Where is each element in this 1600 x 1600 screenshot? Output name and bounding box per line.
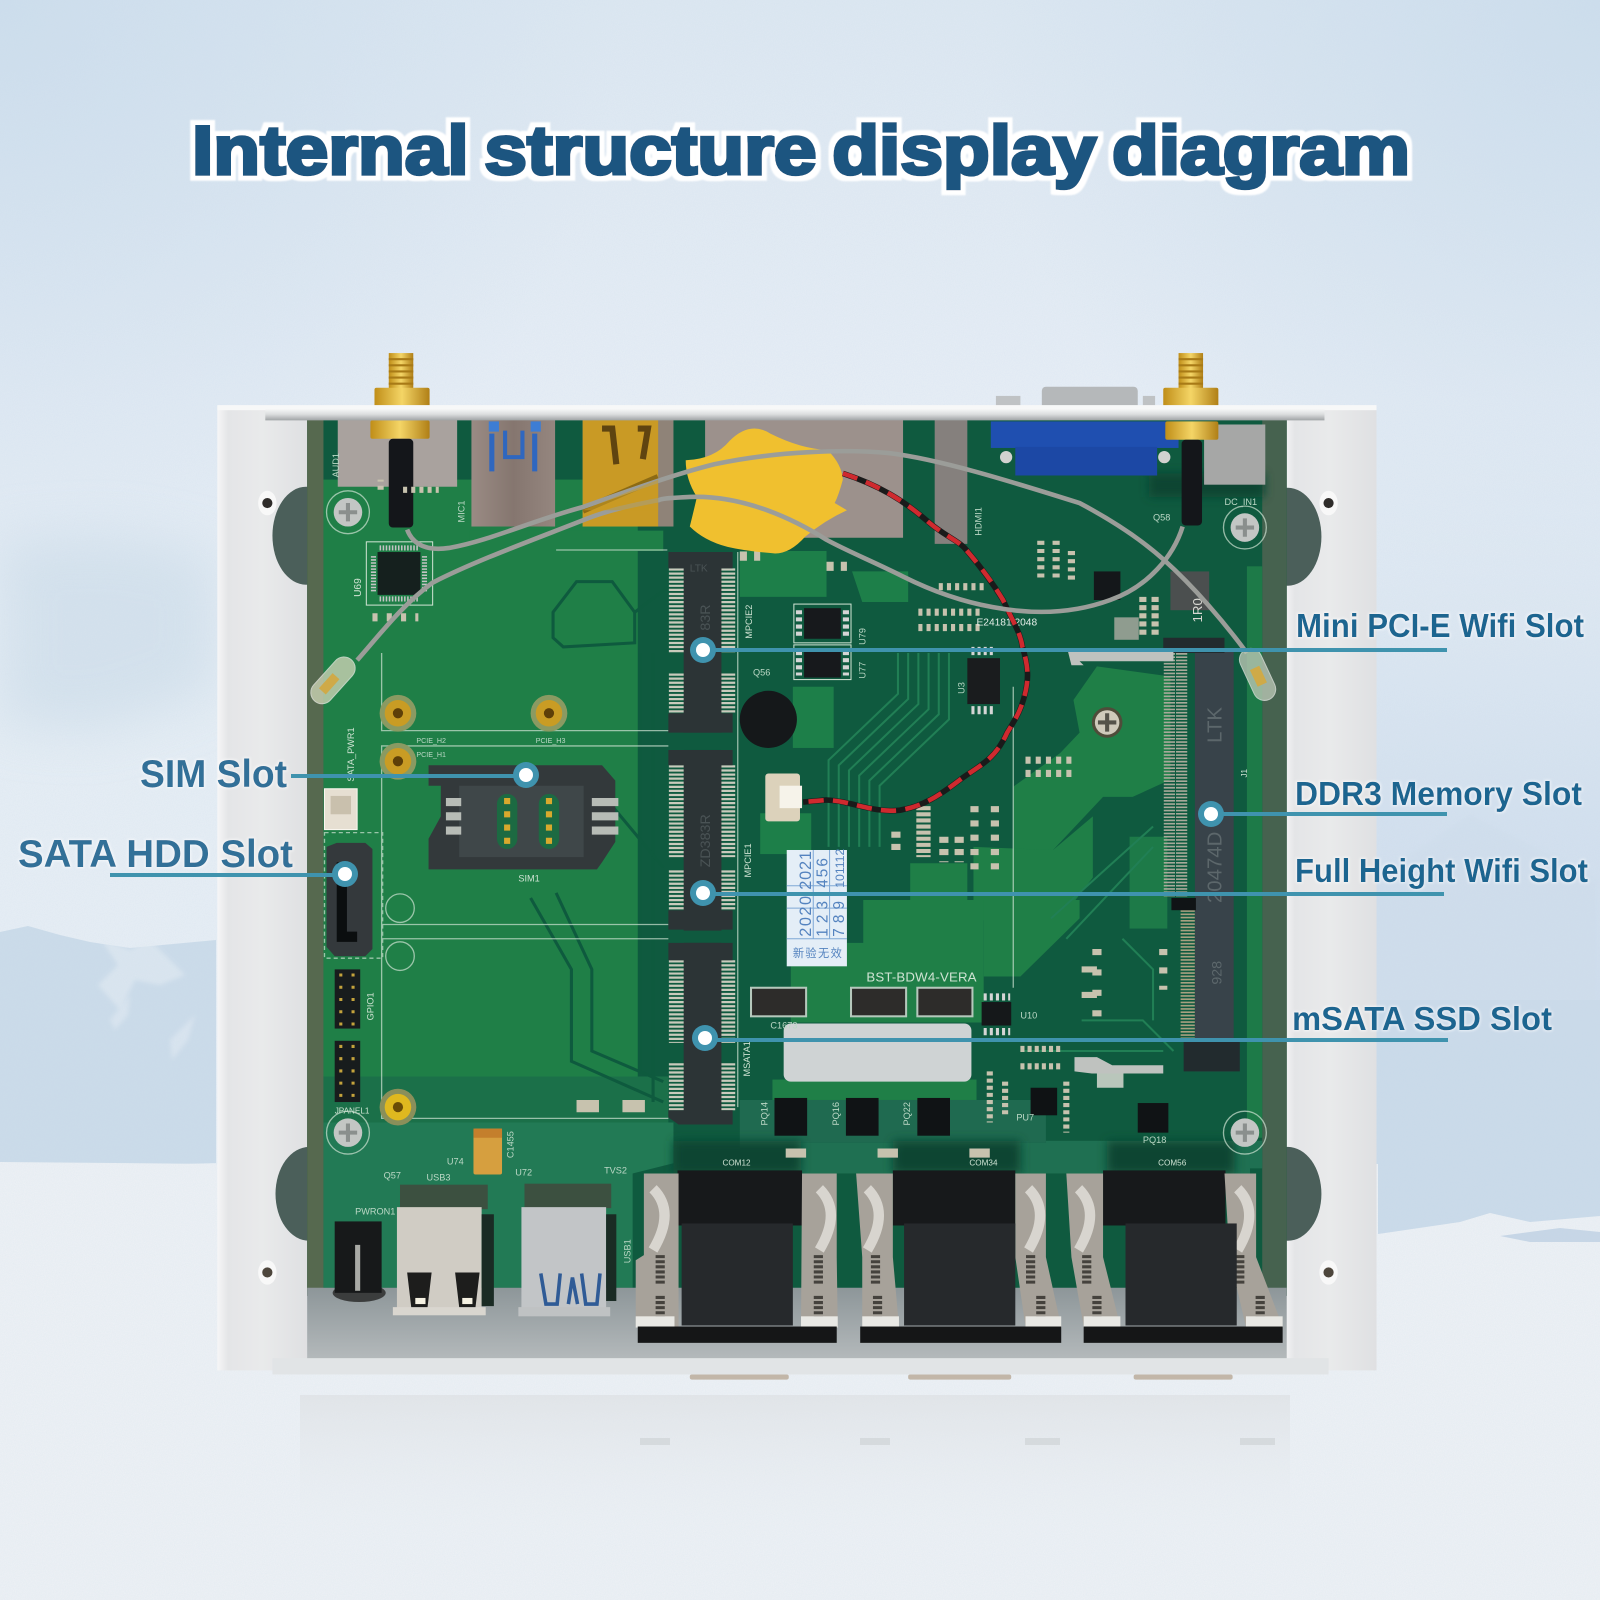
small board labels: U72	[515, 1168, 532, 1178]
right rail	[1284, 406, 1377, 1370]
small board labels: PWRON1	[355, 1206, 395, 1216]
mini PCIe slot 1: 83R	[698, 604, 714, 631]
JPANEL header: JPANEL1	[335, 1106, 370, 1115]
mini PCIe slot 2: MPCIE1	[743, 843, 753, 878]
antenna cap left	[306, 652, 360, 708]
small board labels: DC_IN1	[1224, 497, 1257, 507]
small board labels: PCIE_H1	[416, 751, 446, 759]
kapton tape overlay on cables	[583, 480, 658, 510]
antenna cap right	[1236, 645, 1279, 704]
validity sticker: 123	[815, 896, 832, 937]
callout: SATA HDD Slot: SATA HDD Slot	[18, 833, 293, 876]
small board labels: HDMI1	[974, 507, 984, 536]
shadows behind serial ports	[673, 473, 1264, 1173]
mini PCIe slot 3: mSATA: MSATA1	[742, 1041, 752, 1077]
reflection of the device on the snow	[300, 1395, 1290, 1545]
COM12 serial port	[636, 1158, 838, 1343]
callout: DDR3 Memory Slot: DDR3 Memory Slot	[1295, 775, 1582, 812]
silver blank label	[784, 1023, 971, 1082]
small board labels: USB3	[427, 1173, 450, 1183]
callout: mSATA SSD Slot	[692, 1000, 1552, 1051]
gray antenna cable B	[357, 497, 1183, 660]
audio codec chip: U69	[353, 578, 364, 597]
DDR slot metal latches	[1067, 617, 1173, 1088]
small board labels: Q57	[384, 1171, 401, 1181]
callout: DDR3 Memory Slot	[1198, 775, 1582, 827]
COM34 serial port	[856, 1158, 1061, 1343]
mini PCIe slot 1: MPCIE2	[744, 605, 754, 639]
small board labels	[331, 453, 1257, 1263]
small board labels: TVS2	[604, 1165, 627, 1175]
silkscreen outlines	[324, 491, 1266, 1154]
top port: DC jack shield	[1204, 424, 1265, 485]
SIM card slot	[429, 765, 618, 884]
USB port 2 with blue tongues	[518, 1184, 616, 1316]
callout: Full Height Wifi Slot	[690, 852, 1588, 906]
COM56 serial port	[1066, 1158, 1283, 1343]
DDR3 memory slot: 20474D	[1204, 832, 1226, 903]
battery: yellow wrapped	[686, 428, 847, 553]
validity sticker: 456	[815, 856, 832, 888]
top port: HDMI with kapton tape	[583, 419, 673, 527]
tantalum capacitor	[473, 1129, 502, 1174]
JPANEL header	[335, 1041, 370, 1115]
USB port 1	[393, 1185, 494, 1315]
top port: HDMI shield	[935, 419, 967, 544]
validity sticker: 789	[831, 896, 848, 937]
gold standoffs	[380, 695, 567, 1126]
motherboard PCB	[307, 418, 1287, 1296]
left rail	[217, 406, 307, 1370]
SATA power connector: SATA_PWR1	[346, 727, 356, 782]
SIM card slot: SIM1	[518, 874, 540, 884]
small board labels: U10	[1020, 1010, 1037, 1020]
validity sticker: 101112	[833, 849, 847, 888]
callout: Full Height Wifi Slot: Full Height Wifi Slot	[1295, 852, 1588, 889]
small ICs	[794, 571, 1209, 1133]
fan connector	[765, 773, 802, 821]
small board labels: U79	[857, 628, 867, 645]
small board labels: C1673	[770, 1021, 797, 1031]
small board labels: MIC1	[456, 501, 466, 522]
validity sticker	[787, 849, 848, 966]
antenna leads	[370, 420, 1218, 528]
DDR3 memory slot: LTK	[1204, 707, 1226, 743]
power button	[333, 1221, 386, 1302]
small board labels: PU7	[1016, 1112, 1034, 1122]
DDR3 memory slot: 928	[1209, 961, 1225, 985]
top port: VGA connector	[991, 421, 1179, 476]
top lip	[217, 405, 1377, 420]
callout: mSATA SSD Slot: mSATA SSD Slot	[1292, 1000, 1552, 1037]
validity sticker: 2021	[797, 851, 815, 890]
callout: Mini PCI-E Wifi Slot: Mini PCI-E Wifi Slot	[1296, 607, 1584, 644]
title: Internal structure display diagram	[192, 112, 1410, 189]
passive component clusters	[372, 480, 1163, 1153]
inductors row	[751, 988, 972, 1016]
callout: Mini PCI-E Wifi Slot	[690, 607, 1584, 663]
mini PCIe slot 2	[668, 750, 753, 931]
SATA power connector	[324, 727, 357, 830]
mini PCIe slot 1: LTK	[690, 563, 708, 574]
top port: LAN shield	[705, 419, 903, 538]
gray antenna cable A	[407, 451, 1247, 653]
small board labels: U74	[447, 1156, 464, 1166]
COM34 serial port: COM34	[969, 1158, 998, 1167]
validity sticker: 2020	[797, 896, 815, 937]
MOSFET row	[774, 1098, 950, 1136]
small board labels: PQ14	[759, 1102, 769, 1126]
DDR3 memory slot	[1163, 638, 1249, 1071]
callout: SIM Slot	[140, 753, 539, 796]
small board labels: E24181 2048	[977, 618, 1037, 629]
callout: SATA HDD Slot	[18, 833, 358, 887]
bottom lip	[272, 1358, 1329, 1374]
small board labels: PQ18	[1143, 1135, 1166, 1145]
small board labels: Q58	[1153, 512, 1170, 522]
small board labels: USB1	[623, 1239, 633, 1263]
small board labels: AUD1	[331, 453, 341, 478]
board model label: BST-BDW4-VERA	[866, 970, 977, 985]
device: open mini PC chassis with motherboard	[217, 353, 1377, 1380]
mini PCIe slot 3: mSATA	[668, 943, 752, 1124]
callout: SIM Slot: SIM Slot	[140, 753, 287, 796]
small board labels: U77	[857, 662, 867, 679]
small board labels: PCIE_H2	[416, 737, 446, 745]
validity sticker: 新验无效	[793, 946, 842, 960]
small board labels: 1R0	[1190, 598, 1205, 622]
buzzer	[740, 691, 797, 748]
rear feet	[690, 1374, 1233, 1380]
chassis screw holes	[258, 491, 1338, 1285]
board mount screws	[334, 498, 1259, 1147]
SATA connector	[327, 843, 372, 956]
battery lead: red and black twisted wire	[803, 473, 1028, 811]
mini PCIe slot 1	[668, 552, 754, 733]
board traces	[531, 582, 668, 1102]
top port: USB with blue tabs	[471, 419, 555, 527]
DDR3 memory slot: J1	[1240, 768, 1249, 778]
GPIO header	[335, 969, 375, 1029]
small board labels: U3	[956, 682, 966, 694]
corner cutouts	[272, 487, 1321, 1241]
small board labels: Q56	[753, 668, 770, 678]
chassis floor	[307, 1288, 1287, 1363]
small board labels: PQ22	[902, 1102, 912, 1126]
COM12 serial port: COM12	[722, 1158, 751, 1167]
small board labels: C1455	[505, 1131, 515, 1158]
rear connectors above lip	[374, 353, 1218, 410]
GPIO header: GPIO1	[365, 992, 375, 1020]
top port: audio jack	[338, 419, 457, 487]
small board labels: PQ16	[831, 1102, 841, 1126]
mini PCIe slot 2: ZD383R	[698, 814, 714, 867]
audio codec chip	[353, 542, 433, 605]
small board labels: PCIE_H3	[536, 737, 565, 745]
COM56 serial port: COM56	[1158, 1158, 1187, 1167]
